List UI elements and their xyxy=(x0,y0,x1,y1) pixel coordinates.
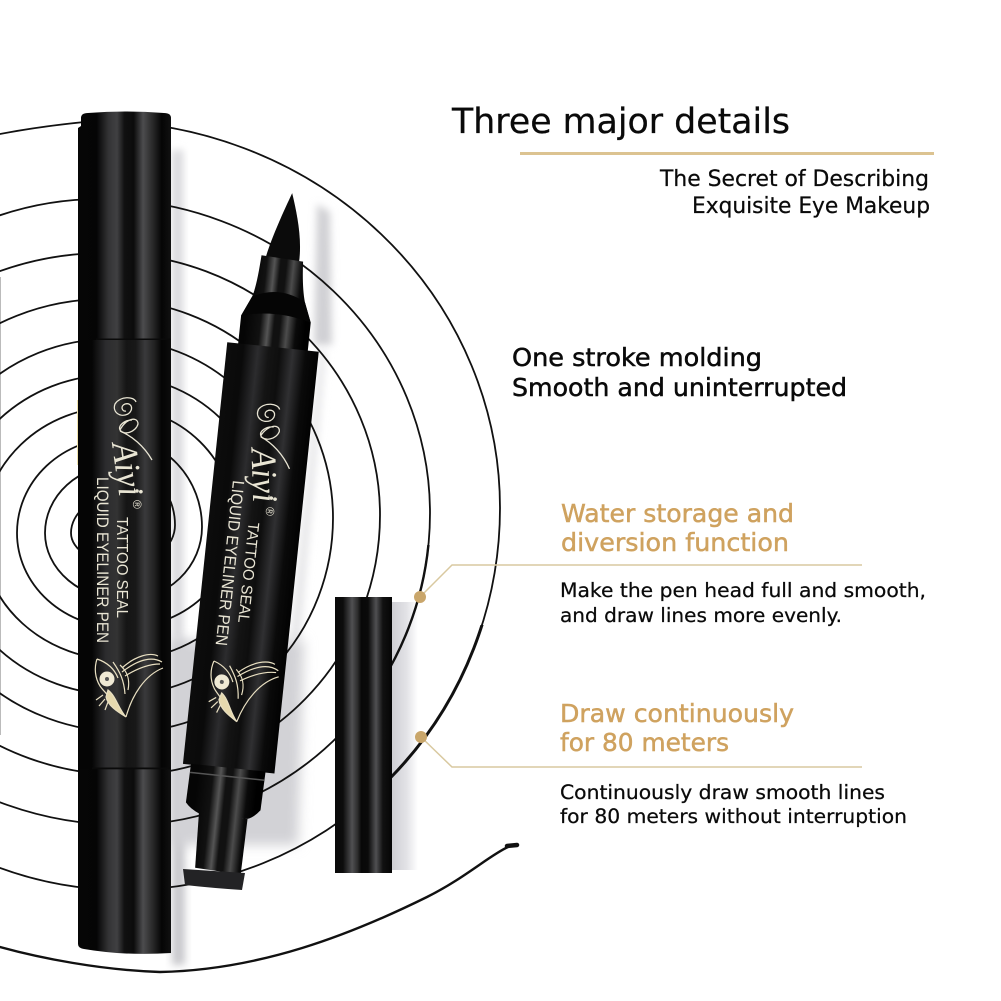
stamp stem xyxy=(193,812,248,875)
neck xyxy=(238,254,317,353)
brand name: Aiyi xyxy=(104,438,151,499)
feature heading: water storage: Water storage and xyxy=(561,499,794,528)
brand dot xyxy=(269,496,273,500)
feature heading: draw continuously: Draw continuously xyxy=(560,699,794,728)
brand flourish xyxy=(252,403,296,469)
spiral line drawing xyxy=(0,121,517,972)
brand flourish xyxy=(114,398,152,460)
product name: liquid eyeliner pen: LIQUID EYELINER PEN xyxy=(212,480,247,647)
subtitle xyxy=(659,166,930,219)
feature text: water storage: and draw lines more evenly. xyxy=(560,604,842,627)
product name: tattoo seal: TATTOO SEAL xyxy=(113,517,130,618)
feature text: draw continuously: Continuously draw smooth lines xyxy=(560,781,885,804)
brand dot xyxy=(135,489,139,493)
registered mark: ® xyxy=(262,506,277,517)
registered mark: ® xyxy=(130,500,144,509)
feature text: water storage: Make the pen head full and smooth, xyxy=(560,579,926,602)
lower collar xyxy=(185,764,266,820)
main barrel xyxy=(183,342,319,773)
pen: full eyeliner pen body xyxy=(77,112,171,954)
feature text: water storage xyxy=(560,579,926,627)
pen cap xyxy=(335,597,392,873)
icon: eye emblem xyxy=(206,656,280,726)
feature text: draw continuously xyxy=(560,781,907,828)
feature heading: draw continuously xyxy=(560,699,794,757)
product name: tattoo seal: TATTOO SEAL xyxy=(234,521,262,624)
product name: liquid eyeliner pen: LIQUID EYELINER PEN xyxy=(93,477,111,643)
icon: eye emblem xyxy=(95,654,163,717)
brand name: Aiyi xyxy=(243,446,285,503)
subtitle: The Secret of Describing xyxy=(659,166,929,192)
product shadows xyxy=(0,150,418,965)
pen: angled eyeliner with felt tip and stamp xyxy=(172,188,335,890)
feature heading: draw continuously: for 80 meters xyxy=(560,728,729,757)
felt tip nib xyxy=(265,191,306,263)
wing stamp xyxy=(183,869,245,890)
pen label: brand and product name xyxy=(93,398,163,717)
title divider xyxy=(520,152,934,155)
feature heading: water storage: diversion function xyxy=(561,528,789,557)
callout: water storage leader line and dot xyxy=(414,565,862,603)
subtitle: Exquisite Eye Makeup xyxy=(692,193,930,219)
feature: one stroke molding: One stroke molding xyxy=(512,343,762,372)
title: Three major details xyxy=(451,102,790,142)
feature heading: water storage xyxy=(561,499,794,557)
callout: draw continuously leader line and dot xyxy=(415,731,862,767)
feature text: draw continuously: for 80 meters without interruption xyxy=(560,805,907,828)
pen label: angled pen xyxy=(204,401,307,726)
feature: one stroke molding xyxy=(512,343,847,402)
feature: one stroke molding: Smooth and uninterrupted xyxy=(512,373,847,402)
